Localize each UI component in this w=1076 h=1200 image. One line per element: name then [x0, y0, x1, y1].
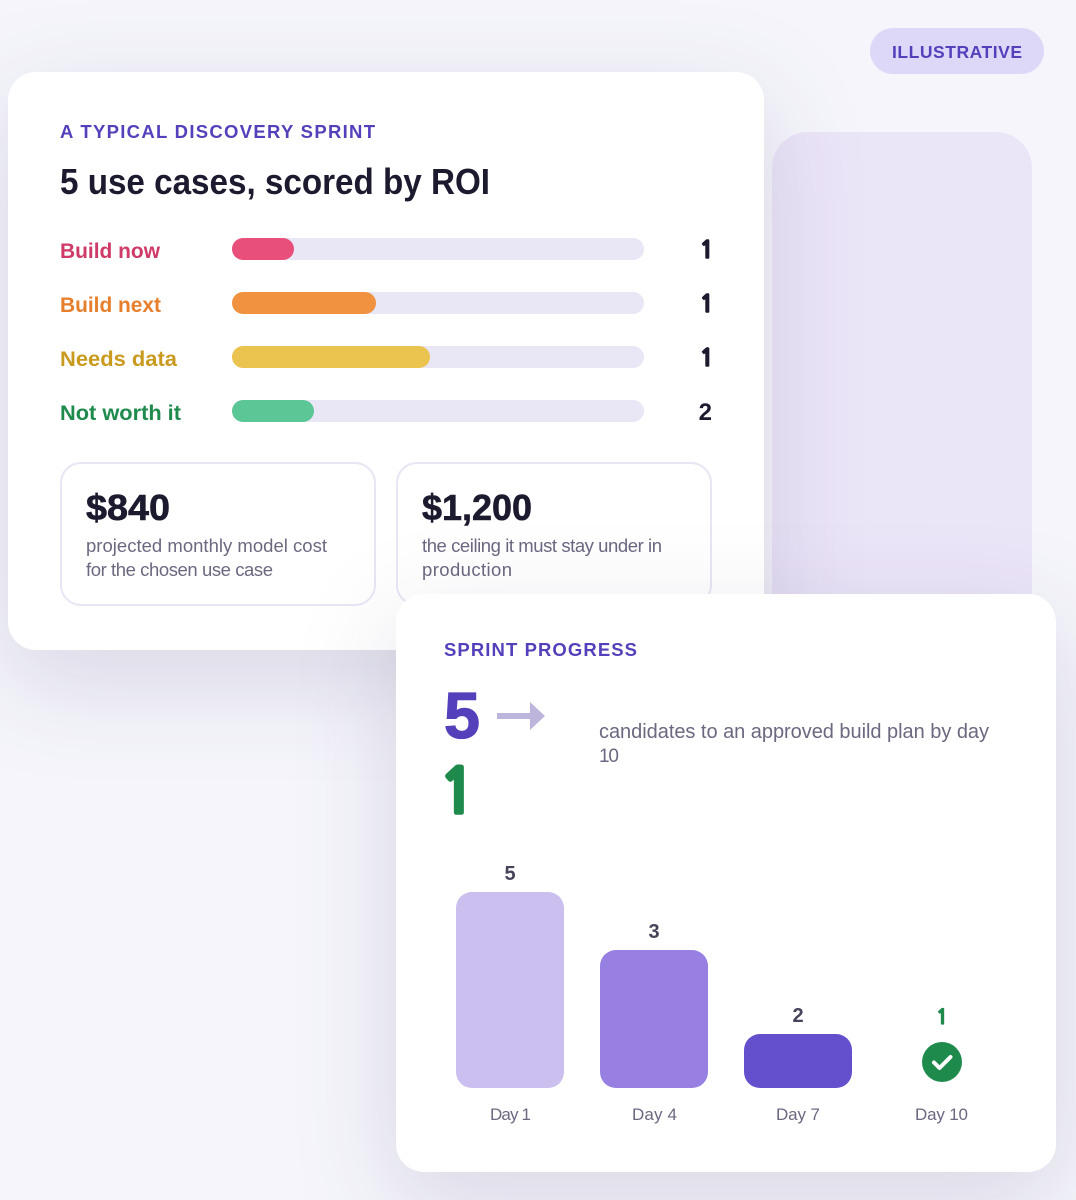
- row: needs data: [60, 346, 714, 371]
- stat card: cost ceiling: the ceiling it must stay under in: [422, 535, 662, 556]
- description: [599, 721, 989, 767]
- stat card: projected cost: for the chosen use case: [86, 559, 273, 580]
- panel: use case scoring card: [8, 72, 764, 650]
- description: candidates to an approved build plan by day: [599, 721, 989, 743]
- badge: illustrative: [870, 28, 1044, 74]
- icon: check: [922, 1042, 962, 1082]
- row: not worth it: Not worth it: [60, 401, 181, 425]
- column: day 7: [744, 1005, 852, 1124]
- big number: 5: 5: [444, 679, 480, 752]
- big number: 1: 1: [439, 763, 476, 823]
- column: day 1: Day 1: [490, 1105, 531, 1124]
- column: day 10: Day 10: [915, 1105, 968, 1124]
- stat card: projected cost: projected monthly model cost: [86, 535, 327, 556]
- panel: background lavender card: [772, 132, 1032, 632]
- description: 10: [599, 746, 619, 767]
- column: day 4: 3: [648, 921, 660, 943]
- row: build next: 1: [699, 292, 714, 316]
- row: build now: 1: [699, 238, 714, 262]
- row: not worth it: [60, 399, 712, 426]
- stat card: cost ceiling: [397, 463, 711, 605]
- badge: illustrative: ILLUSTRATIVE: [892, 42, 1022, 62]
- column: day 1: 5: [504, 863, 516, 885]
- row: build now: Build now: [60, 239, 160, 263]
- row: needs data: 1: [699, 346, 714, 370]
- row: build next: Build next: [60, 293, 161, 317]
- row: needs data: Needs data: [60, 347, 178, 371]
- column: day 4: [600, 921, 708, 1124]
- column: day 10: [915, 1007, 968, 1124]
- row: build next: [60, 292, 714, 317]
- row: build now: [60, 238, 714, 263]
- column: day 1: [456, 863, 564, 1124]
- stat card: cost ceiling: $1,200: [422, 487, 532, 528]
- eyebrow heading: SPRINT PROGRESS: [444, 639, 637, 660]
- stat card: cost ceiling: production: [422, 559, 512, 580]
- eyebrow heading: A TYPICAL DISCOVERY SPRINT: [60, 121, 376, 142]
- column: day 7: 2: [792, 1005, 804, 1027]
- stat card: projected cost: $840: [86, 487, 170, 528]
- column: day 10: 1: [936, 1007, 948, 1027]
- column: day 4: Day 4: [632, 1105, 677, 1124]
- stat card: projected cost: [61, 463, 375, 605]
- title: 5 use cases, scored by ROI: [60, 161, 490, 202]
- panel: sprint progress card: [396, 594, 1056, 1172]
- icon: arrow: [497, 702, 545, 730]
- row: not worth it: 2: [699, 399, 712, 426]
- column: day 7: Day 7: [776, 1105, 820, 1124]
